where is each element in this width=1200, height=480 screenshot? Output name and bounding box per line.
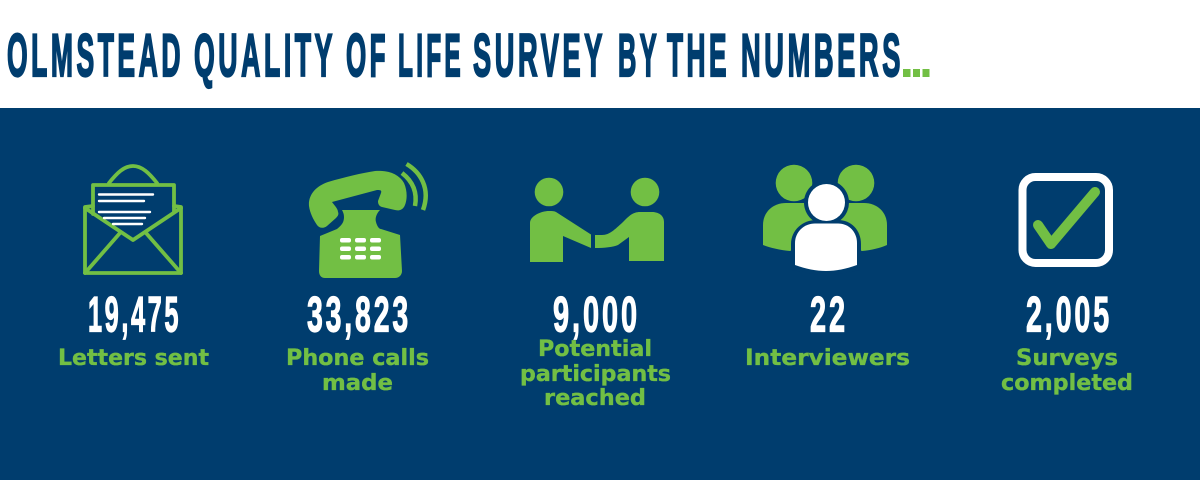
stat: interviewers: Interviewers <box>745 346 910 371</box>
stat: letters sent <box>58 286 209 371</box>
stat: phone calls made: Phone calls <box>286 346 429 371</box>
icon: checkbox with tick <box>1022 177 1109 263</box>
icon: open envelope with letter <box>85 166 181 273</box>
text: NUMBERS <box>741 22 904 89</box>
stat: surveys completed: 2,005 <box>1026 286 1112 342</box>
title: THE <box>667 22 730 89</box>
title ellipsis dots <box>903 69 930 77</box>
stat: interviewers <box>745 286 910 371</box>
stat: potential participants reached: Potential <box>538 337 652 362</box>
stat: phone calls made <box>286 286 429 396</box>
title: QUALITY <box>194 22 336 89</box>
icon: handshake <box>530 178 664 262</box>
stat: potential participants reached: participants <box>520 362 671 387</box>
icon: group of people <box>763 165 887 276</box>
stat: surveys completed: completed <box>1001 371 1133 396</box>
stat: letters sent: Letters sent <box>58 346 209 371</box>
title <box>7 22 904 89</box>
title: SURVEY <box>473 22 606 89</box>
title: BY <box>618 22 660 89</box>
stat: surveys completed <box>1001 286 1133 396</box>
title: LIFE <box>398 22 464 89</box>
stat: interviewers: 22 <box>810 286 848 342</box>
stat: potential participants reached: reached <box>544 386 646 411</box>
stat: potential participants reached <box>520 286 671 411</box>
stat: surveys completed: Surveys <box>1016 346 1118 371</box>
title: OLMSTEAD <box>7 22 184 89</box>
title: OF <box>346 22 389 89</box>
stat: phone calls made: made <box>322 371 393 396</box>
icon: telephone <box>309 164 426 278</box>
stat: letters sent: 19,475 <box>88 286 181 342</box>
stat: potential participants reached: 9,000 <box>553 286 640 342</box>
stat: phone calls made: 33,823 <box>307 286 411 342</box>
